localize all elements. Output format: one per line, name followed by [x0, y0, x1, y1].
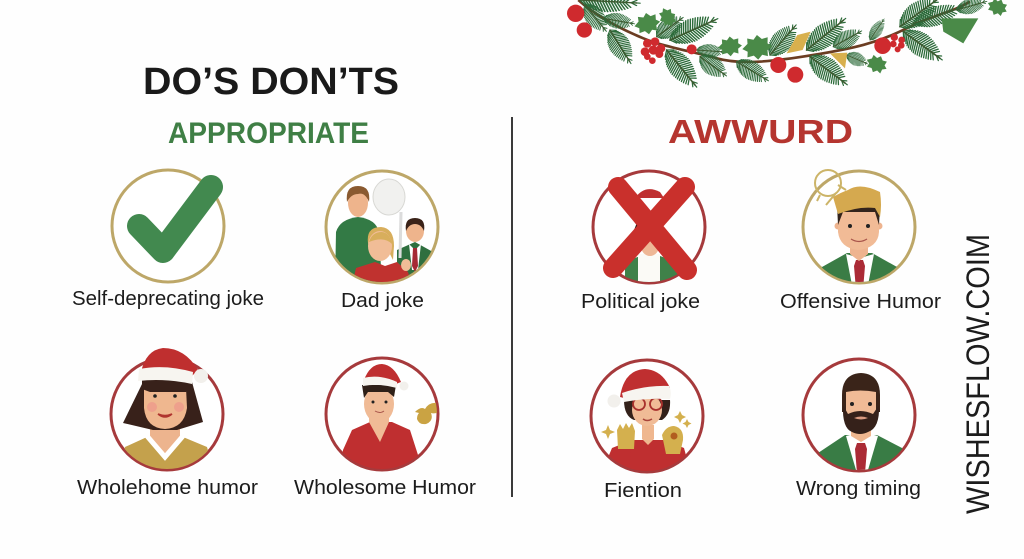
icon: man with gold hair and lightbulb — [803, 170, 915, 290]
heading: awwurd: AWWURD — [668, 113, 853, 150]
label: fiention: Fiention — [604, 480, 682, 502]
panel: appropriate — [72, 117, 476, 499]
label: wholesome humor: Wholesome Humor — [294, 477, 476, 499]
icon: bearded man in green jacket — [803, 359, 915, 480]
label: political joke: Political joke — [581, 291, 700, 313]
icon: green check mark — [112, 170, 224, 282]
heading: appropriate: APPROPRIATE — [168, 117, 369, 150]
title: DO’S DON’TS — [143, 61, 399, 103]
vertical watermark: WISHESFLOW.COIM — [960, 234, 996, 514]
label: dad joke: Dad joke — [341, 290, 424, 312]
label: wholehome humor: Wholehome humor — [77, 477, 258, 499]
icon: woman with glasses and gold mittens — [591, 360, 703, 475]
label: wrong timing: Wrong timing — [796, 478, 921, 500]
icon: man in santa hat and red shirt — [326, 358, 441, 475]
label: offensive humor: Offensive Humor — [780, 291, 941, 313]
icon: family with speech balloon — [326, 171, 438, 285]
icon: crossed-out person — [593, 171, 705, 286]
icon: woman in santa hat — [111, 348, 223, 475]
christmas garland — [567, 0, 1010, 94]
panel: awkward — [581, 113, 941, 502]
center divider — [511, 117, 513, 497]
label: self-deprecating joke: Self-deprecating joke — [72, 288, 264, 310]
